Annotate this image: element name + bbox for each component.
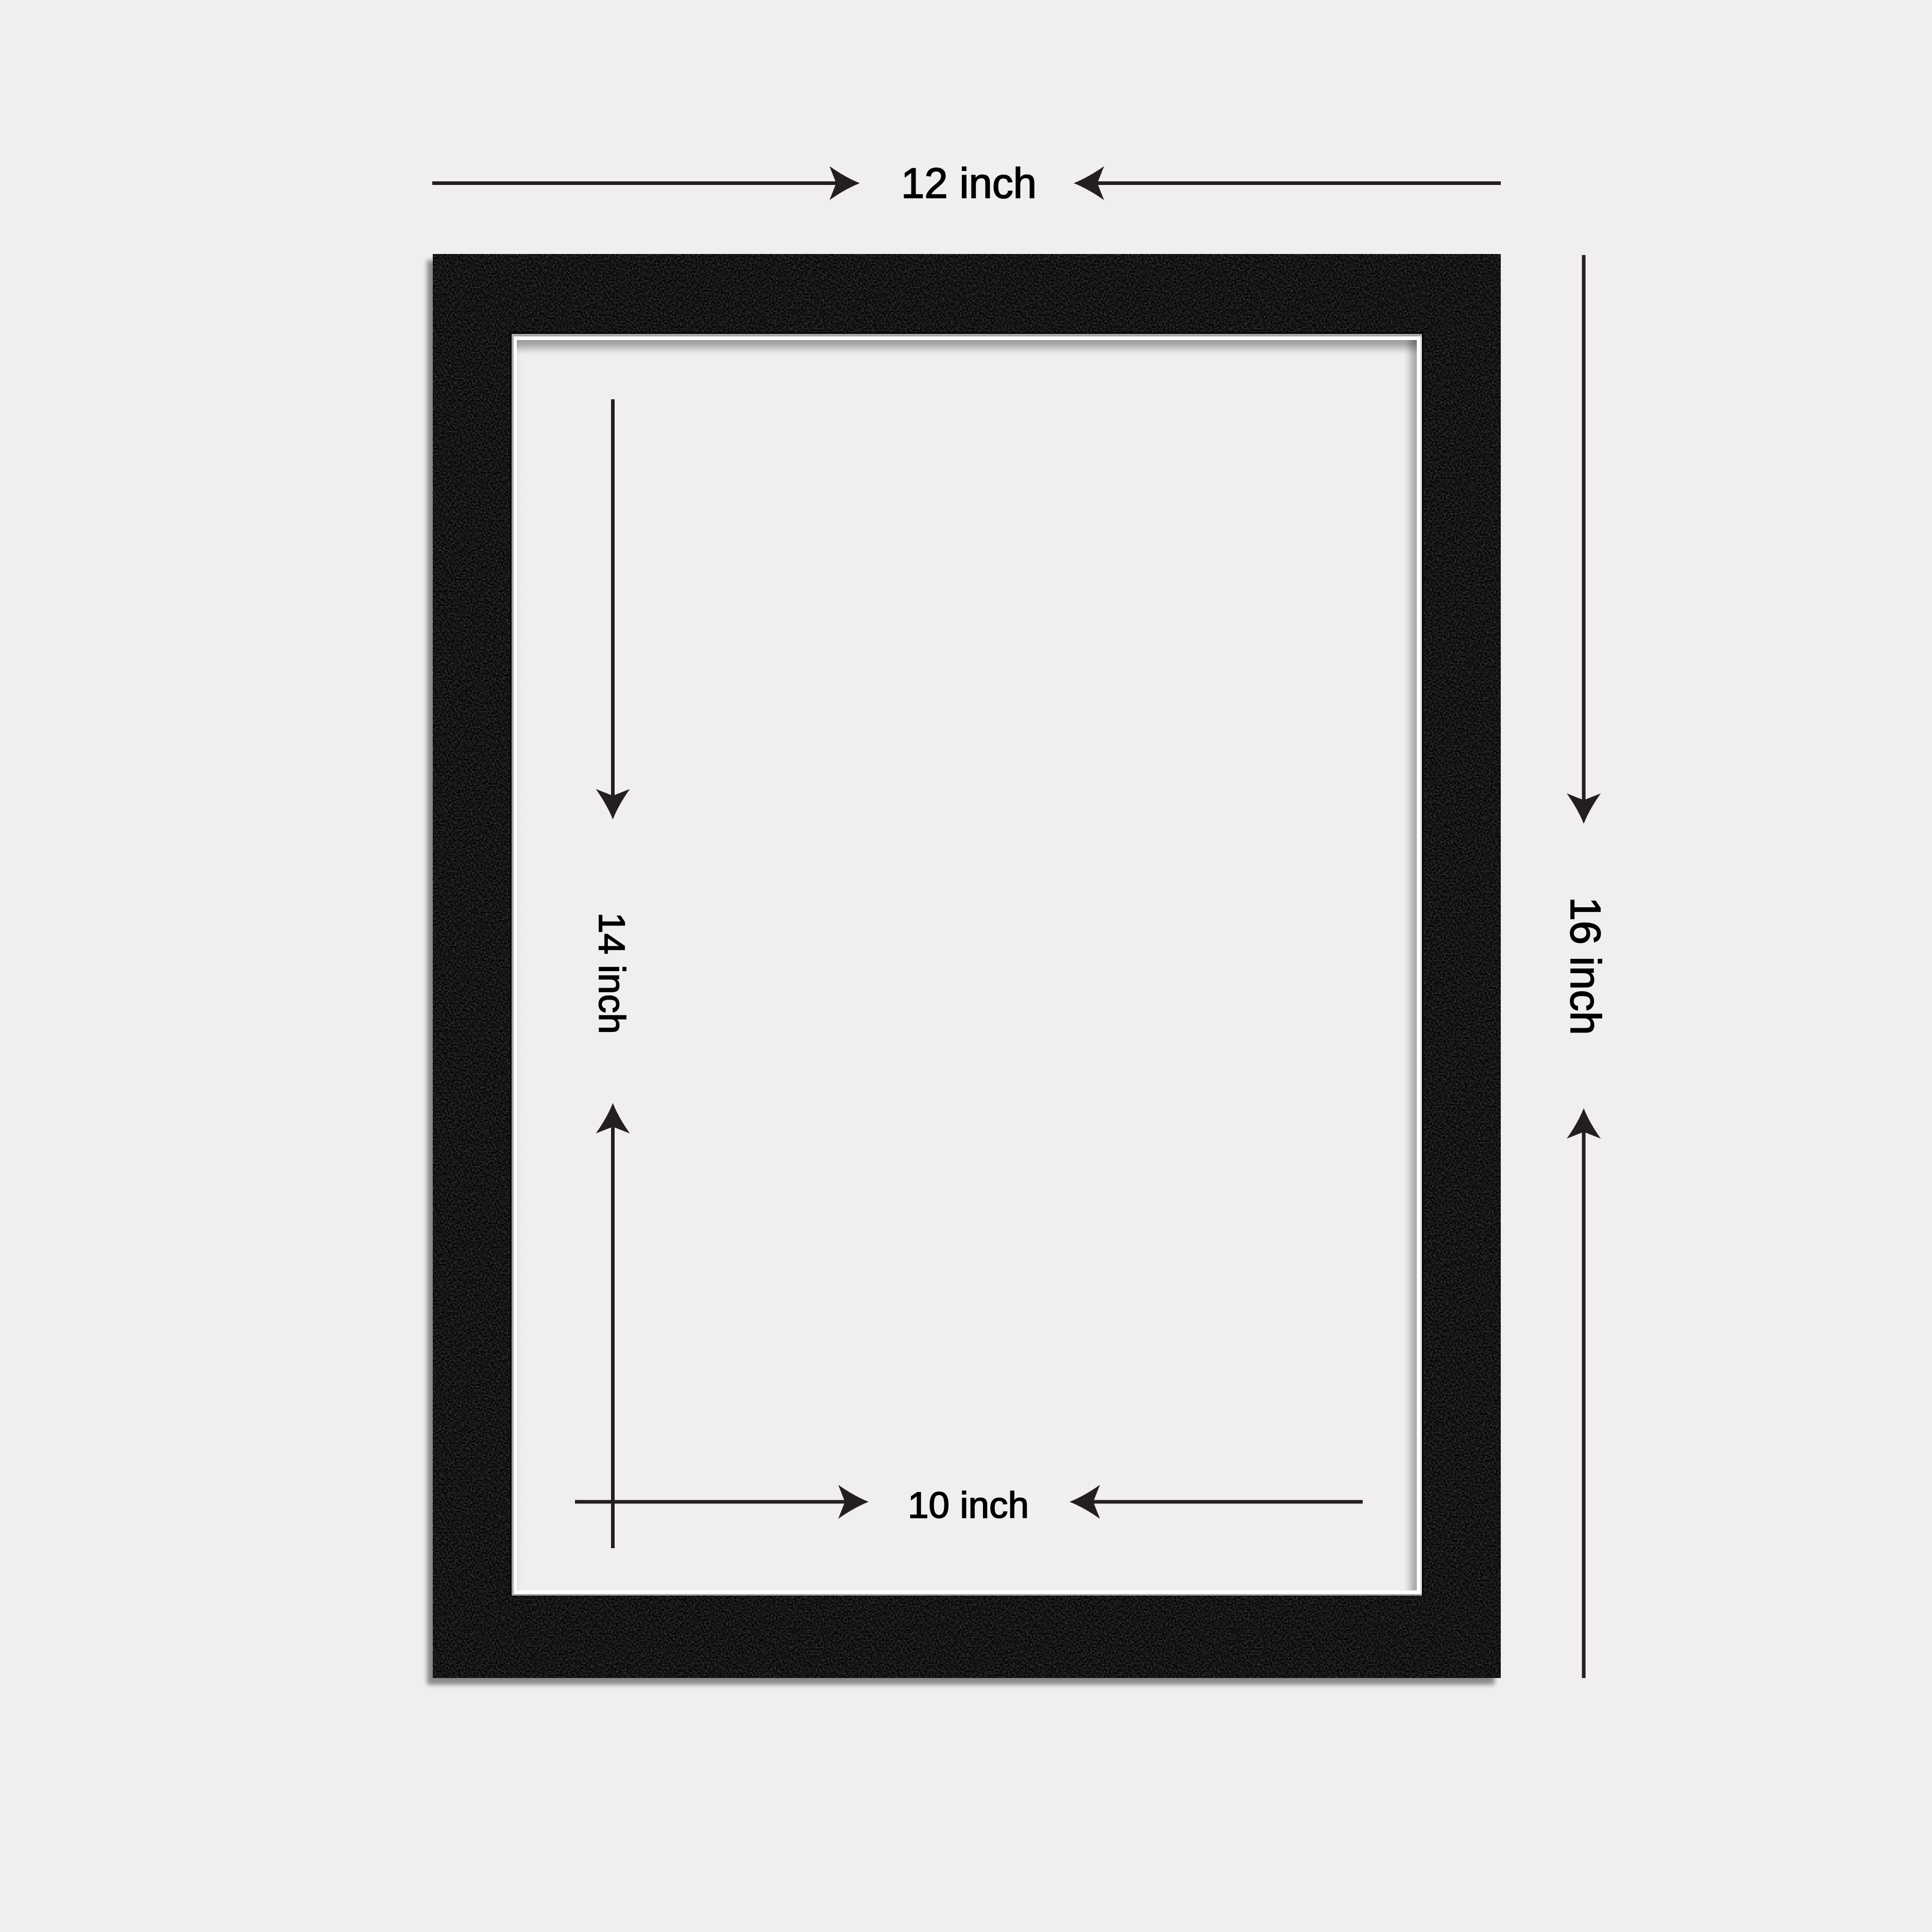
label: 12 inch: 12 inch <box>901 160 1037 207</box>
arrow: 10 inch left <box>575 1485 869 1519</box>
panel: black mat frame with white-edged opening <box>427 254 1501 1685</box>
arrow: 14 inch bottom <box>596 1103 630 1548</box>
arrow: 16 inch top <box>1567 255 1601 824</box>
dimension: 14 inch opening height <box>591 399 632 1548</box>
arrow: 14 inch top <box>596 399 630 819</box>
arrow: 12 inch right <box>1074 166 1501 200</box>
dimension: 10 inch opening width <box>575 1485 1363 1526</box>
arrow: 16 inch bottom <box>1567 1108 1601 1678</box>
dimension: 12 inch outer width <box>432 160 1501 207</box>
label: 14 inch: 14 inch <box>591 912 632 1034</box>
arrow: 10 inch right <box>1070 1485 1363 1519</box>
label: 16 inch: 16 inch <box>1562 897 1609 1035</box>
label: 10 inch: 10 inch <box>908 1485 1029 1526</box>
arrow: 12 inch left <box>432 166 860 200</box>
dimension: 16 inch outer height <box>1562 255 1609 1678</box>
